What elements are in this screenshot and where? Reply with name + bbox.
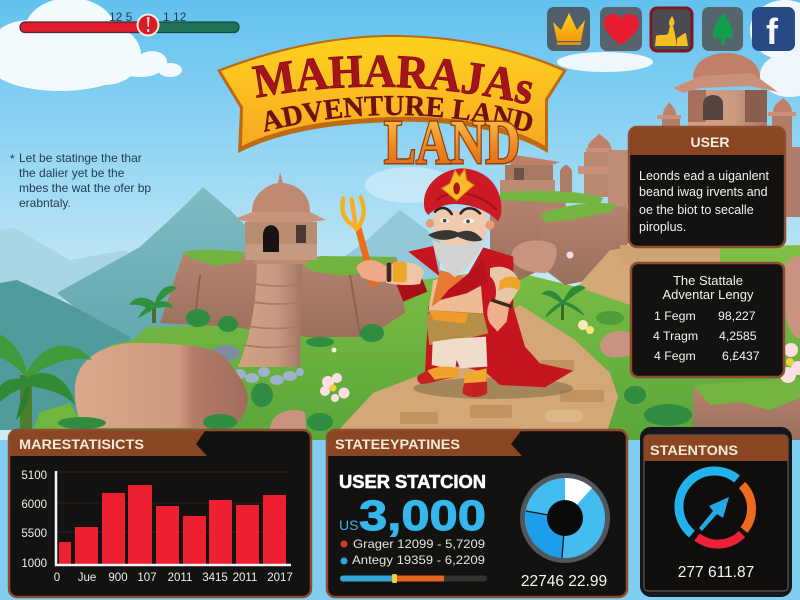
staff (358, 228, 373, 284)
beard (432, 236, 485, 277)
stats rows: 4 Tragm (653, 329, 698, 343)
stats rows: 4,2585 (719, 329, 757, 343)
progress bar (340, 574, 487, 583)
fort far wall right (783, 147, 800, 217)
user text: Leonds ead a uiganlent (639, 169, 769, 183)
fort (500, 53, 800, 217)
y axis labels: 5100 (21, 470, 47, 482)
tower door (263, 225, 279, 252)
cliffs right (490, 191, 632, 285)
banner ribbon (217, 35, 567, 153)
x axis labels: 0 (54, 572, 60, 584)
user header (630, 128, 784, 155)
bar chart (21, 470, 293, 584)
x axis labels (54, 572, 293, 584)
ground (90, 245, 800, 440)
bar green side (150, 22, 239, 32)
right rocks (270, 256, 800, 440)
torso (428, 273, 483, 313)
stations header (644, 435, 788, 461)
title banner (217, 35, 567, 177)
legend row one: Grager 12099 - 5,7209 (353, 537, 485, 551)
fort side tower right (768, 98, 796, 155)
tower cabin (245, 222, 317, 264)
intro note (10, 151, 151, 210)
y axis labels (21, 470, 47, 570)
icon: facebook: f (766, 11, 779, 52)
x axis labels: 900 (108, 572, 128, 584)
strategy heading: STATEEYPATINES (335, 437, 460, 452)
note lines: the dalier yet be the (19, 166, 125, 180)
clouds top left (0, 0, 182, 91)
clouds right (365, 0, 800, 203)
distant fort building (500, 155, 572, 192)
x axis labels: Jue (78, 572, 96, 584)
pants (432, 337, 487, 370)
donut value: 22746 22.99 (521, 573, 607, 590)
mountains (0, 187, 440, 430)
panel: stations (641, 428, 791, 596)
stats heading: Adventar Lengy (662, 287, 754, 302)
moustache (428, 230, 483, 241)
currency label: US (339, 517, 358, 533)
eyebrows (435, 208, 480, 214)
big number: 3,000 (359, 492, 486, 540)
left arm (383, 262, 424, 285)
icon: tree (702, 7, 743, 51)
title line 2: ADVENTURE LAND (264, 96, 532, 132)
x axis labels: 2011 (233, 572, 257, 584)
stats rows: 4 Fegm (654, 349, 696, 363)
chart header (10, 431, 207, 456)
palm left (0, 332, 92, 435)
icon: facebook (752, 7, 795, 52)
x axis labels: 3415 (202, 572, 228, 584)
score left: 12 5 (109, 10, 133, 24)
stats rows (653, 309, 760, 363)
stone path lower (337, 305, 618, 432)
right arm (490, 267, 519, 303)
hand (356, 260, 390, 282)
note lines: mbes the wat the ofer bp (19, 181, 151, 195)
belt and skirt (426, 310, 488, 345)
path stones (400, 360, 604, 424)
stats rows: 1 Fegm (654, 309, 696, 323)
icon: crown (547, 7, 590, 51)
banner curves (256, 87, 535, 106)
turban jewel (442, 168, 474, 201)
donut chart (520, 473, 610, 563)
y axis labels: 1000 (21, 558, 47, 570)
y axis labels: 6000 (21, 499, 47, 511)
stations body (644, 435, 788, 591)
gauge needle (699, 497, 729, 531)
user station heading: USER STATCION (339, 472, 486, 492)
fort wall (608, 150, 632, 205)
stats rows: 6,£437 (722, 349, 760, 363)
right shoe (463, 368, 487, 397)
note bullet: * (10, 152, 15, 166)
legend row two: Antegy 19359 - 6,2209 (352, 553, 485, 567)
character shadow (413, 378, 573, 399)
title line 1: MAHARAJAs (252, 55, 532, 104)
panel: strategy (327, 430, 627, 597)
stone path upper (577, 245, 650, 305)
panel: market statistics (9, 430, 311, 597)
tower body (238, 262, 302, 367)
panel: adventure stats (631, 263, 784, 377)
icon: heart (600, 7, 642, 51)
sky (0, 0, 800, 440)
bar red side (20, 22, 145, 32)
fort side tower left (578, 133, 615, 197)
palm small (129, 286, 177, 323)
left shoe (417, 368, 458, 384)
stats heading: The Stattale (673, 273, 743, 288)
cliff left (160, 250, 405, 337)
scene background (0, 0, 800, 440)
stations heading: STAENTONS (650, 442, 738, 458)
fort main tower (673, 53, 778, 132)
icon buttons (547, 7, 795, 52)
score bar (20, 10, 239, 36)
palm right (541, 285, 586, 320)
gauge value: 277 611.87 (678, 564, 754, 581)
trident (342, 197, 364, 229)
strategy header (328, 431, 522, 456)
cape (408, 246, 573, 387)
tower eave (235, 212, 326, 222)
chart heading: MARESTATISICTS (19, 437, 144, 452)
note lines: erabntaly. (19, 196, 71, 210)
panel: user (629, 127, 785, 247)
user text: piroplus. (639, 220, 686, 234)
gauge (679, 471, 752, 544)
icon: palace (651, 8, 692, 51)
knob (136, 14, 160, 36)
title word land: LAND (384, 109, 520, 177)
x axis labels: 107 (137, 572, 157, 584)
turban (424, 168, 501, 222)
user heading: USER (691, 134, 729, 150)
ground left patch (33, 403, 85, 430)
bushes (58, 309, 692, 431)
x axis labels: 2011 (168, 572, 192, 584)
user text: beand iwag irvents and (639, 185, 768, 199)
fort small tower centre (657, 102, 681, 134)
x axis labels: 2017 (267, 572, 293, 584)
base stones (212, 345, 304, 385)
score right: 1 12 (163, 10, 187, 24)
lighthouse tower (235, 172, 326, 367)
maharaja character (342, 168, 573, 399)
large boulder (75, 343, 248, 428)
flowers (320, 252, 800, 402)
tower dome (252, 172, 310, 212)
note lines: Let be statinge the thar (19, 151, 142, 165)
eyes (440, 218, 475, 224)
head (433, 210, 487, 246)
user text: oe the biot to secalle (639, 203, 754, 217)
stats rows: 98,227 (718, 309, 756, 323)
y axis labels: 5500 (21, 528, 47, 540)
